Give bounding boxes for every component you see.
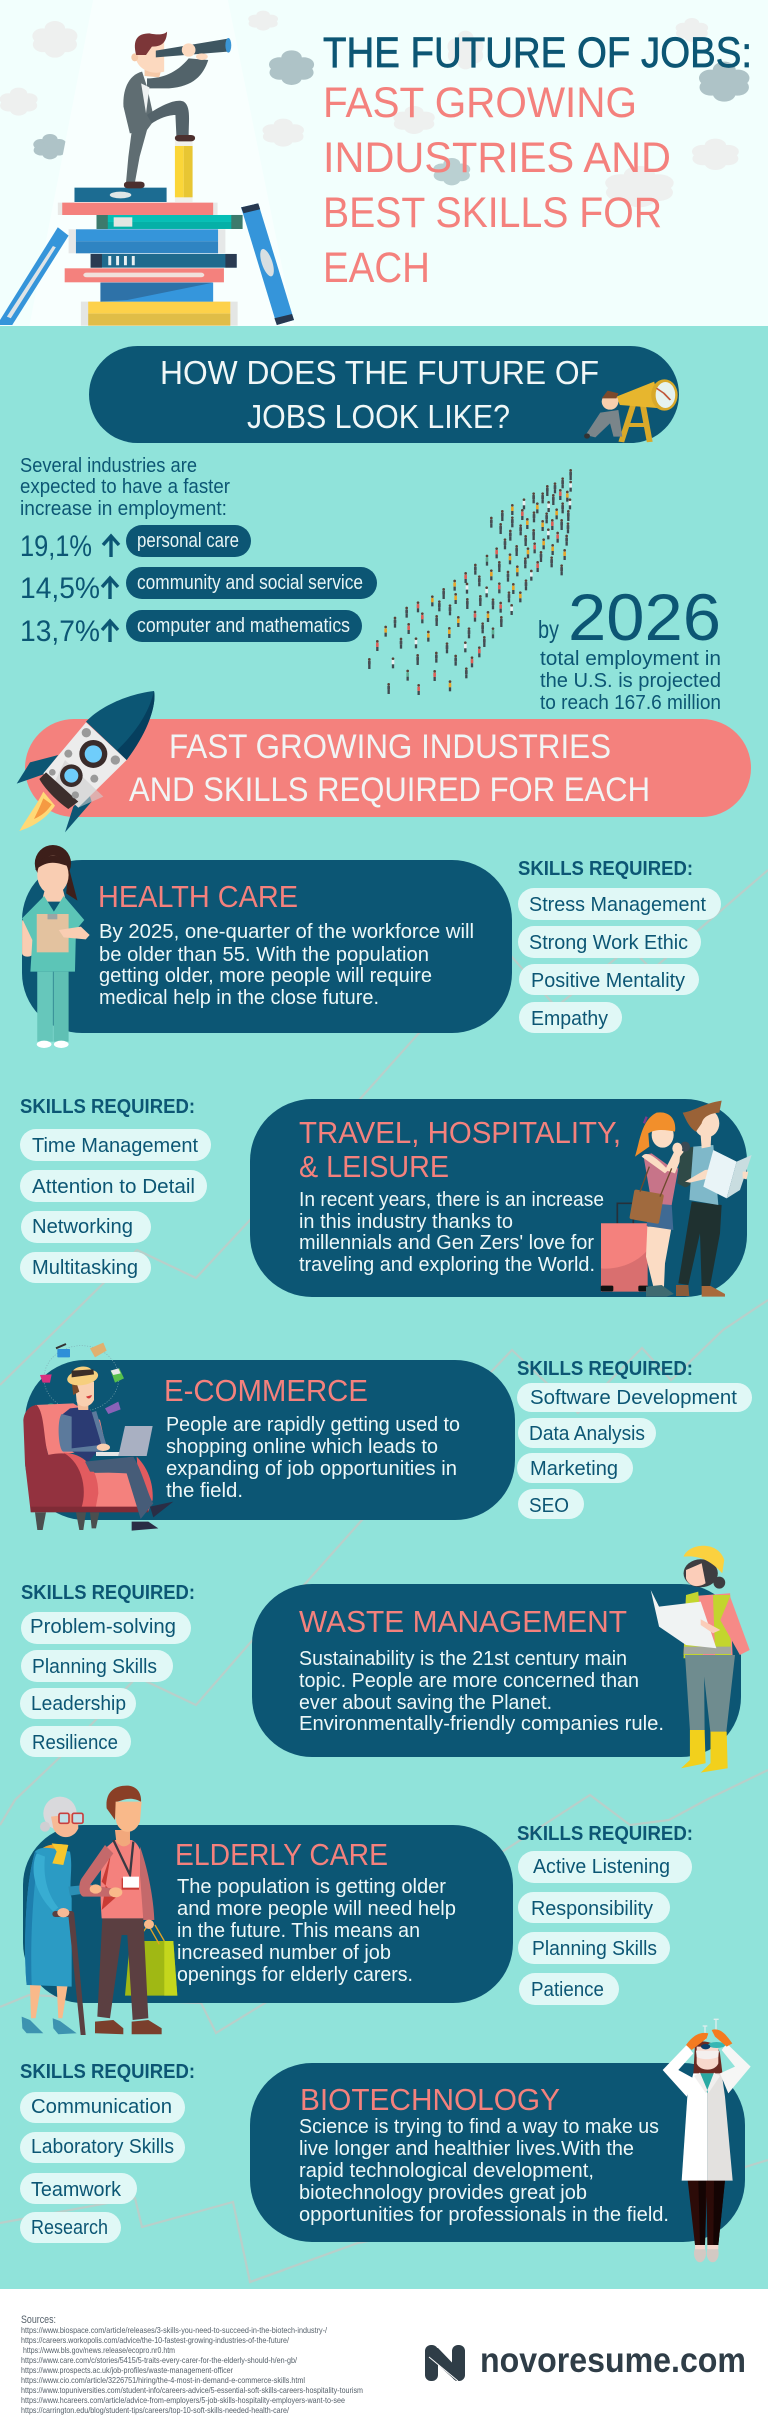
skill pill: Data Analysis bbox=[529, 1423, 645, 1445]
stat: by 2026 total employment: by bbox=[538, 616, 559, 644]
panel: e-commerce: E-COMMERCE bbox=[164, 1373, 368, 1408]
skill pill: Leadership bbox=[31, 1693, 126, 1715]
skill pill: Empathy bbox=[531, 1008, 608, 1030]
stat: computer and mathematics 13,7%: 13,7% bbox=[20, 615, 100, 648]
icon: travellers with suitcase and map bbox=[601, 1101, 752, 1297]
icon: N mark bbox=[425, 2345, 465, 2381]
panel: waste management bbox=[252, 1546, 750, 1773]
skill pill bbox=[517, 1453, 633, 1483]
skill pill: Active Listening bbox=[533, 1856, 670, 1878]
icon: nurse bbox=[22, 845, 90, 1048]
heading pill: fast growing industries: FAST GROWING INDUSTRIES bbox=[169, 728, 611, 766]
skills: elderly care bbox=[517, 1823, 693, 2005]
man bbox=[123, 32, 231, 188]
panel: travel, hospitality and leisure bbox=[250, 1099, 752, 1297]
sources: https://www.hcareers.com/article/advice-from-employers/5-job-skills-hospitality-employers-want-to-see bbox=[21, 2395, 345, 2405]
skill pill bbox=[21, 1612, 191, 1644]
skill pill: Software Development bbox=[530, 1387, 737, 1409]
heading pill: how does the future of jobs look like: HOW DOES THE FUTURE OF bbox=[160, 354, 599, 391]
stat: by 2026 total employment: total employment in bbox=[540, 648, 721, 670]
skill pill: Research bbox=[31, 2217, 108, 2239]
panel: waste management: topic. People are more concerned than bbox=[299, 1670, 639, 1692]
panel: e-commerce: expanding of job opportunities in bbox=[166, 1458, 457, 1480]
heading pill: fast growing industries: AND SKILLS REQUIRED FOR EACH bbox=[129, 771, 650, 809]
skill pill bbox=[20, 1129, 211, 1161]
panel: e-commerce: People are rapidly getting used to bbox=[166, 1414, 460, 1436]
title: FAST GROWING bbox=[323, 79, 637, 127]
arrow up bbox=[102, 578, 118, 599]
skill pill bbox=[20, 1726, 131, 1757]
panel: travel, hospitality and leisure: in this industry thanks to bbox=[299, 1211, 513, 1233]
skill pill bbox=[519, 1973, 619, 2005]
skill pill bbox=[518, 1418, 656, 1448]
skill pill bbox=[518, 1851, 692, 1883]
skill pill: Resilience bbox=[32, 1732, 118, 1754]
panel: biotechnology: live longer and healthier lives.With the bbox=[299, 2138, 634, 2160]
stat: personal care 19,1%: 19,1% bbox=[20, 530, 92, 563]
icon: rocket bbox=[17, 691, 155, 832]
panel: waste management: WASTE MANAGEMENT bbox=[299, 1604, 627, 1639]
title bbox=[323, 29, 752, 292]
title: EACH bbox=[323, 244, 430, 292]
skill pill: SEO bbox=[529, 1495, 569, 1517]
skill pill: Teamwork bbox=[31, 2179, 122, 2201]
skill pill bbox=[20, 1252, 151, 1283]
intro text: Several industries are bbox=[20, 455, 197, 477]
panel: waste management: Environmentally-friendly companies rule. bbox=[299, 1713, 664, 1735]
sources bbox=[21, 2314, 363, 2415]
sources: https://carrington.edu/blog/student-tips/careers/top-10-soft-skills-needed-health-care/ bbox=[21, 2405, 290, 2415]
skills: biotechnology bbox=[20, 2061, 195, 2243]
skill pill: Time Management bbox=[32, 1135, 198, 1157]
skill pill bbox=[21, 1211, 151, 1243]
crowd of people forming an upward arrow bbox=[368, 469, 572, 695]
stat: personal care 19,1%: personal care bbox=[137, 530, 239, 552]
panel: elderly care: openings for elderly carers. bbox=[177, 1964, 413, 1986]
panel: e-commerce: shopping online which leads to bbox=[166, 1436, 438, 1458]
skill pill: Communication bbox=[31, 2096, 172, 2118]
panel: health care bbox=[22, 845, 512, 1048]
panel: biotechnology: biotechnology provides great job bbox=[299, 2182, 587, 2204]
skill pill bbox=[518, 1932, 670, 1964]
skills: elderly care: SKILLS REQUIRED: bbox=[517, 1823, 693, 1845]
skill pill: Problem-solving bbox=[30, 1616, 176, 1638]
skills: travel: SKILLS REQUIRED: bbox=[20, 1096, 195, 1118]
arrow up bbox=[103, 536, 119, 557]
heading pill: how does the future of jobs look like bbox=[89, 346, 679, 443]
panel: elderly care: ELDERLY CARE bbox=[175, 1837, 388, 1872]
skill pill: Laboratory Skills bbox=[31, 2136, 174, 2158]
skill pill: Multitasking bbox=[32, 1257, 138, 1279]
skill pill: Attention to Detail bbox=[32, 1176, 195, 1198]
skill pill: Positive Mentality bbox=[531, 970, 685, 992]
skill pill bbox=[20, 1170, 207, 1202]
icon: construction worker with plans bbox=[651, 1546, 750, 1773]
skill pill bbox=[20, 2212, 121, 2243]
skills: biotechnology: SKILLS REQUIRED: bbox=[20, 2061, 195, 2083]
panel: travel, hospitality and leisure: In recent years, there is an increase bbox=[299, 1189, 604, 1211]
panel: elderly care: in the future. This means an bbox=[177, 1920, 420, 1942]
panel: waste management: Sustainability is the 21st century main bbox=[299, 1648, 627, 1670]
title: INDUSTRIES AND bbox=[323, 134, 671, 182]
intro text bbox=[20, 455, 230, 520]
icon: elderly woman with carer bbox=[22, 1786, 177, 2035]
panel: health care: getting older, more people will require bbox=[99, 965, 432, 987]
skill pill: Stress Management bbox=[529, 894, 706, 916]
panel: travel, hospitality and leisure: millennials and Gen Zers' love for bbox=[299, 1232, 594, 1254]
stat: by 2026 total employment: to reach 167.6 million bbox=[540, 692, 721, 714]
stat: by 2026 total employment: the U.S. is projected bbox=[540, 670, 721, 692]
sources: https://careers.workopolis.com/advice/the-10-fastest-growing-industries-of-the-future/ bbox=[21, 2335, 290, 2345]
skill pill bbox=[519, 1002, 622, 1033]
skill pill: Marketing bbox=[530, 1458, 618, 1480]
books pile bbox=[0, 140, 294, 326]
heading pill: fast growing industries bbox=[25, 719, 751, 817]
stat: computer and mathematics 13,7%: computer and mathematics bbox=[137, 615, 350, 637]
skill pill: Planning Skills bbox=[532, 1938, 657, 1960]
skill pill bbox=[20, 2132, 185, 2163]
skills: e-commerce: SKILLS REQUIRED: bbox=[517, 1358, 693, 1380]
skill pill: Strong Work Ethic bbox=[529, 932, 688, 954]
skill pill: Planning Skills bbox=[32, 1656, 157, 1678]
stat: community and social service 14,5%: community and social service bbox=[137, 572, 363, 594]
panel: travel, hospitality and leisure: traveling and exploring the World. bbox=[299, 1254, 595, 1276]
panel: health care: be older than 55. With the population bbox=[99, 944, 429, 966]
stat: personal care 19,1% bbox=[20, 525, 251, 563]
skills: health care bbox=[518, 858, 721, 1033]
panel: health care: By 2025, one-quarter of the workforce will bbox=[99, 921, 474, 943]
skill pill bbox=[518, 1489, 584, 1519]
skill pill: Networking bbox=[32, 1216, 133, 1238]
panel: biotechnology: opportunities for professionals in the field. bbox=[299, 2204, 669, 2226]
intro text: expected to have a faster bbox=[20, 476, 230, 498]
skill pill bbox=[20, 1688, 136, 1719]
icon: man shopping online in an armchair bbox=[23, 1343, 173, 1531]
heading pill: how does the future of jobs look like: JOBS LOOK LIKE? bbox=[247, 398, 510, 435]
panel: travel, hospitality and leisure: TRAVEL, HOSPITALITY, bbox=[299, 1115, 621, 1150]
panel: biotechnology bbox=[250, 2019, 751, 2262]
arrow up bbox=[102, 621, 118, 642]
title: BEST SKILLS FOR bbox=[323, 189, 662, 237]
icon: man looking through a telescope bbox=[584, 379, 678, 442]
skills: waste management bbox=[20, 1582, 195, 1757]
panel: travel, hospitality and leisure: & LEISURE bbox=[299, 1149, 449, 1184]
panel: biotechnology: BIOTECHNOLOGY bbox=[300, 2082, 560, 2117]
panel: health care: HEALTH CARE bbox=[98, 879, 298, 914]
intro text: increase in employment: bbox=[20, 498, 227, 520]
icon: scientist in lab coat bbox=[663, 2019, 751, 2262]
skill pill bbox=[20, 2092, 185, 2123]
stat: by 2026 total employment: 2026 bbox=[568, 580, 721, 654]
panel: elderly care: increased number of job bbox=[177, 1942, 391, 1964]
skill pill bbox=[518, 888, 721, 920]
panel: elderly care: The population is getting older bbox=[177, 1876, 446, 1898]
skill pill: Patience bbox=[531, 1979, 604, 2001]
panel: waste management: ever about saving the Planet. bbox=[299, 1692, 552, 1714]
panel: elderly care: and more people will need help bbox=[177, 1898, 456, 1920]
header background bbox=[0, 0, 768, 326]
panel: e-commerce bbox=[23, 1343, 515, 1531]
logo: novoresume: novoresume.com bbox=[480, 2341, 746, 2380]
sources: https://www.cio.com/article/3226751/hiring/the-4-most-in-demand-e-commerce-skills.html bbox=[21, 2375, 305, 2385]
sources: https://www.care.com/c/stories/5415/5-traits-every-carer-for-the-elderly-should-h/en-gb/ bbox=[21, 2355, 298, 2365]
panel: elderly care bbox=[22, 1786, 513, 2035]
sources: https://www.bls.gov/news.release/ecopro.nr0.htm bbox=[23, 2345, 175, 2355]
skill pill bbox=[517, 1383, 752, 1412]
skill pill: Responsibility bbox=[531, 1898, 653, 1920]
skill pill bbox=[21, 1650, 173, 1682]
skills: travel bbox=[20, 1096, 211, 1283]
skill pill bbox=[20, 2173, 137, 2204]
sources: Sources: bbox=[21, 2314, 56, 2326]
header clouds bbox=[0, 11, 749, 207]
skill pill bbox=[519, 964, 699, 995]
stat: by 2026 total employment bbox=[538, 580, 721, 714]
sources: https://www.topuniversities.com/student-info/careers-advice/5-essential-soft-skills-careers-hospitality-tourism bbox=[21, 2385, 363, 2395]
sources: https://www.prospects.ac.uk/job-profiles/waste-management-officer bbox=[21, 2365, 233, 2375]
stat: community and social service 14,5%: 14,5% bbox=[20, 572, 100, 605]
stat: community and social service 14,5% bbox=[20, 567, 377, 605]
skills: waste management: SKILLS REQUIRED: bbox=[21, 1582, 195, 1604]
sources: https://www.biospace.com/article/releases/3-skills-you-need-to-succeed-in-the-biotech-industry-/ bbox=[21, 2325, 328, 2335]
panel: biotechnology: rapid technological development, bbox=[299, 2160, 594, 2182]
panel: e-commerce: the field. bbox=[166, 1480, 243, 1502]
stat: computer and mathematics 13,7% bbox=[20, 610, 362, 648]
panel: health care: medical help in the close future. bbox=[99, 987, 379, 1009]
skill pill bbox=[518, 926, 701, 958]
skill pill bbox=[518, 1892, 670, 1923]
panel: biotechnology: Science is trying to find a way to make us bbox=[299, 2116, 659, 2138]
skills: health care: SKILLS REQUIRED: bbox=[518, 858, 693, 880]
illustration: man with spyglass standing on a pile of books bbox=[0, 0, 294, 326]
skills: e-commerce bbox=[517, 1358, 752, 1519]
